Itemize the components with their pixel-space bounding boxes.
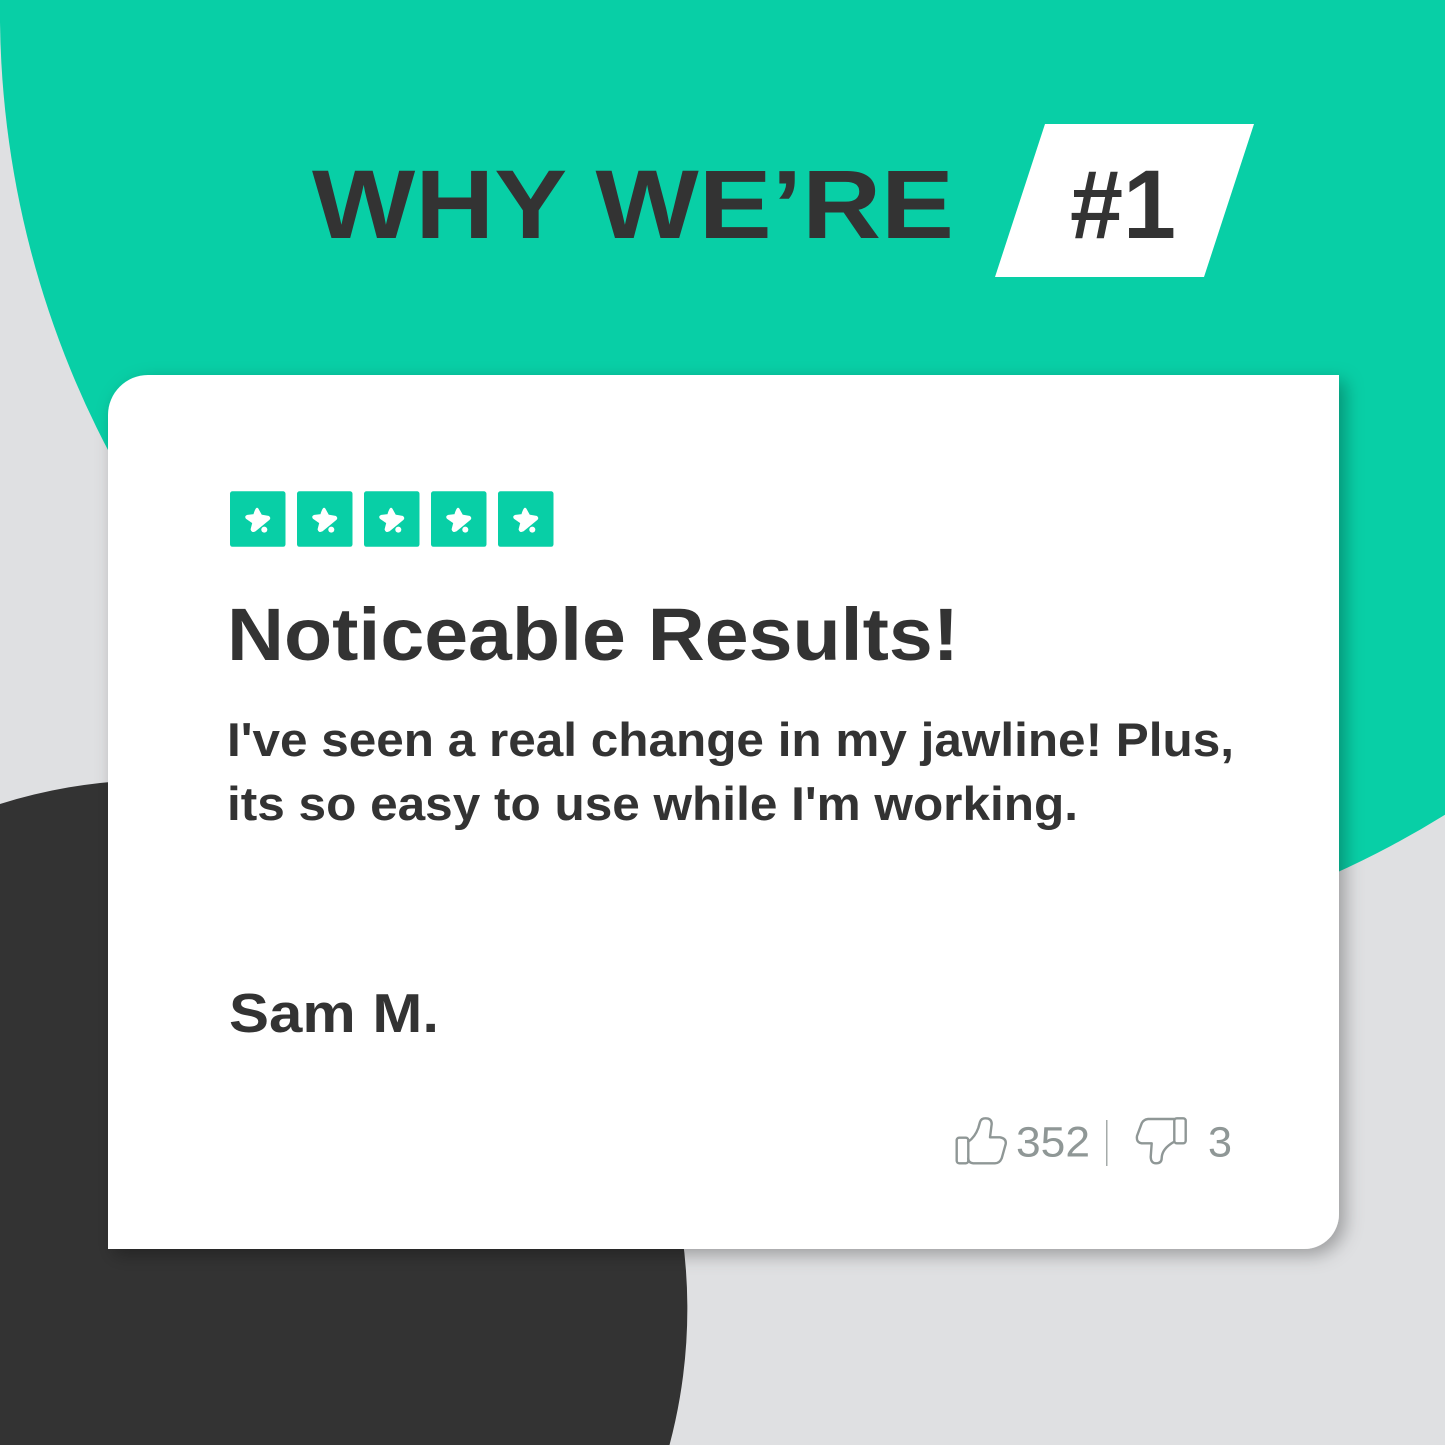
dark circle	[0, 780, 687, 1445]
review body: I've seen a real change in my jawline! Plus,	[227, 713, 1234, 766]
badge: #1: #1	[1070, 150, 1176, 259]
panel: review card	[108, 375, 1339, 1249]
like count: 352	[1016, 1118, 1090, 1166]
review heading: Noticeable Results!	[227, 593, 959, 676]
icon: thumbs up	[957, 1118, 1006, 1163]
title: WHY WE’RE	[312, 150, 954, 259]
green circle	[0, 0, 1445, 957]
dislike count: 3	[1208, 1118, 1232, 1166]
reviewer name: Sam M.	[229, 982, 439, 1044]
star rating	[230, 491, 554, 547]
icon: thumbs down	[1137, 1118, 1186, 1163]
badge: #1	[995, 124, 1254, 277]
divider	[1106, 1120, 1108, 1166]
review body: its so easy to use while I'm working.	[227, 777, 1078, 830]
review body	[227, 713, 1234, 830]
